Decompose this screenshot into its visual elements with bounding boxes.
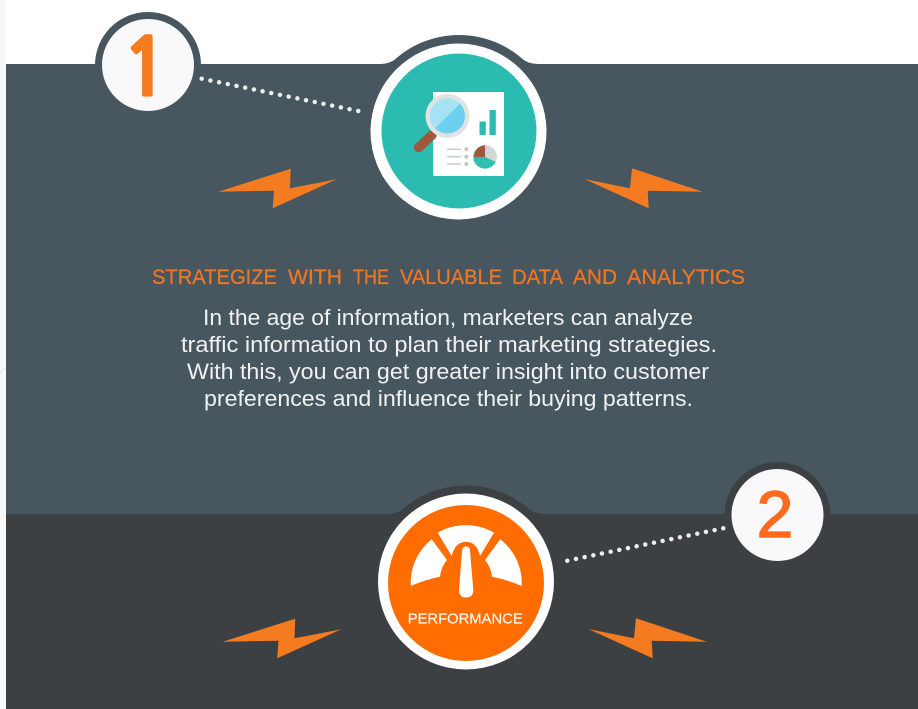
list lines and dots [447, 147, 468, 166]
heading [152, 266, 745, 289]
lightning bolt top right [584, 168, 703, 208]
magnifying glass [418, 94, 470, 148]
dotted connector 1 [202, 79, 358, 111]
lightning bolt top left [218, 169, 337, 208]
number badge 1 [102, 19, 194, 111]
number badge 2: 2 [757, 477, 793, 551]
body text: traffic information to plan their marketing strategies. [181, 332, 717, 357]
panel: section two background [6, 462, 918, 709]
panel: section one background [6, 12, 918, 514]
heading: AND [573, 266, 617, 289]
body text [181, 305, 717, 411]
report page [433, 92, 504, 176]
lightning bolt bottom left [223, 619, 341, 658]
body text: In the age of information, marketers can analyze [203, 305, 693, 330]
performance label: PERFORMANCE [408, 610, 523, 627]
icon: analytics report in teal circle [370, 44, 546, 220]
number badge 1: 1 [122, 30, 169, 108]
lightning bolt bottom right [588, 618, 707, 658]
bars [480, 110, 496, 135]
gauge segments [411, 525, 522, 586]
heading: WITH [288, 266, 342, 289]
heading: STRATEGIZE [152, 266, 277, 289]
body text: preferences and influence their buying patterns. [204, 386, 693, 411]
heading: DATA [512, 266, 563, 289]
number badge 2 [732, 469, 824, 561]
icon: performance gauge in orange circle [378, 494, 554, 670]
heading: VALUABLE [400, 266, 502, 289]
pie chart [473, 145, 497, 169]
body text: With this, you can get greater insight into customer [187, 359, 709, 384]
gauge needle [459, 546, 473, 598]
dotted connector 2 [567, 528, 723, 561]
heading: THE [353, 266, 389, 289]
heading: ANALYTICS [627, 266, 745, 289]
